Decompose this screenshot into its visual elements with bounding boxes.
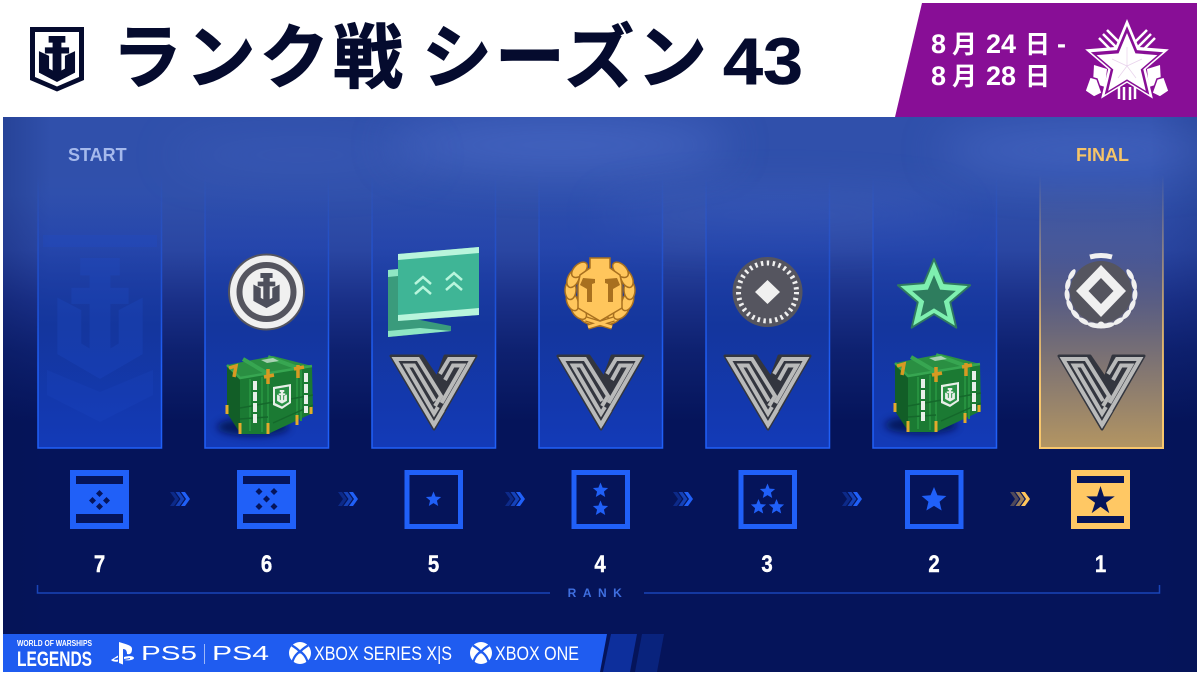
icon: season star emblem <box>1085 19 1169 100</box>
rank numbers <box>94 550 1106 577</box>
rank icon 5 <box>407 472 460 526</box>
Xbox One label: XBOX ONE <box>495 644 579 665</box>
panel: rank 2 <box>873 175 996 448</box>
panel: rank 6 <box>205 175 328 448</box>
rank icon 2 <box>908 472 961 526</box>
rank icon 6 <box>237 470 296 529</box>
rank numbers: 3 <box>761 550 773 577</box>
arrow 6 to 5 <box>338 492 358 506</box>
rank icon 1 <box>1071 470 1130 529</box>
icon: green ribbon flag <box>388 247 479 337</box>
title: 43 <box>723 24 803 98</box>
title: ランク戦 <box>112 19 403 97</box>
arrow 7 to 6 <box>170 492 190 506</box>
arrow 4 to 3 <box>673 492 693 506</box>
date text: 24 <box>986 29 1016 59</box>
icon: xbox <box>470 642 492 664</box>
arrow 3 to 2 <box>842 492 862 506</box>
icon: green crate <box>885 354 981 434</box>
PS5 label: PS5 <box>141 643 197 665</box>
panel: rank 5 <box>372 175 496 448</box>
icon: xbox <box>289 642 311 664</box>
date text: 月 <box>952 31 977 59</box>
panel: rank 1 final <box>1040 175 1163 448</box>
icon: V insignia <box>391 356 476 429</box>
date text: 8 <box>931 61 946 91</box>
rank numbers: 5 <box>428 550 439 577</box>
icon: anchor coin <box>229 254 304 330</box>
arrow 2 to 1 <box>1010 492 1030 506</box>
icon: V insignia <box>1059 356 1144 429</box>
panel: rank 3 <box>706 175 830 448</box>
rank numbers: 7 <box>94 550 105 577</box>
icon: green star <box>898 259 970 328</box>
Xbox Series label: XBOX SERIES X|S <box>314 644 452 665</box>
icon: gold laurel badge <box>557 258 643 334</box>
FINAL label: FINAL <box>1076 145 1129 165</box>
arrow 5 to 4 <box>505 492 525 506</box>
icon: playstation <box>111 642 134 664</box>
rank icon 3 <box>741 472 794 526</box>
rank axis <box>38 585 1160 600</box>
rank icon 4 <box>574 472 628 526</box>
game logo <box>17 639 93 671</box>
footer platform bar <box>3 634 664 672</box>
date text: 8 <box>931 29 946 59</box>
date text: 日 <box>1025 63 1050 91</box>
date text: 日 <box>1025 31 1050 59</box>
title <box>112 19 803 98</box>
divider <box>204 644 205 664</box>
icon: green crate <box>217 356 313 436</box>
date text: - <box>1057 29 1066 59</box>
panel: rank 4 <box>539 175 662 448</box>
date text: 月 <box>952 63 977 91</box>
rank numbers: 1 <box>1095 550 1106 577</box>
icon: diamond dial <box>732 257 802 327</box>
PS4 label: PS4 <box>212 643 269 665</box>
START label: START <box>68 145 127 165</box>
rank axis: RANK <box>568 586 628 600</box>
rank numbers: 4 <box>594 550 606 577</box>
icon: V insignia <box>725 356 810 429</box>
rank numbers: 6 <box>261 550 272 577</box>
date banner <box>895 3 1197 117</box>
rank icon 7 <box>70 470 129 529</box>
panel: rank 7 start <box>38 175 162 448</box>
icon: V insignia <box>558 356 643 429</box>
date text: 28 <box>986 61 1016 91</box>
game logo: WORLD OF WARSHIPS <box>17 639 93 648</box>
game logo: LEGENDS <box>17 648 92 671</box>
date text <box>931 29 1066 91</box>
logo: anchor shield <box>30 27 84 92</box>
icon: white laurel diamond <box>1060 256 1142 333</box>
icon: ghost shield <box>43 235 157 422</box>
rank numbers: 2 <box>928 550 940 577</box>
title: シーズン <box>422 19 707 97</box>
